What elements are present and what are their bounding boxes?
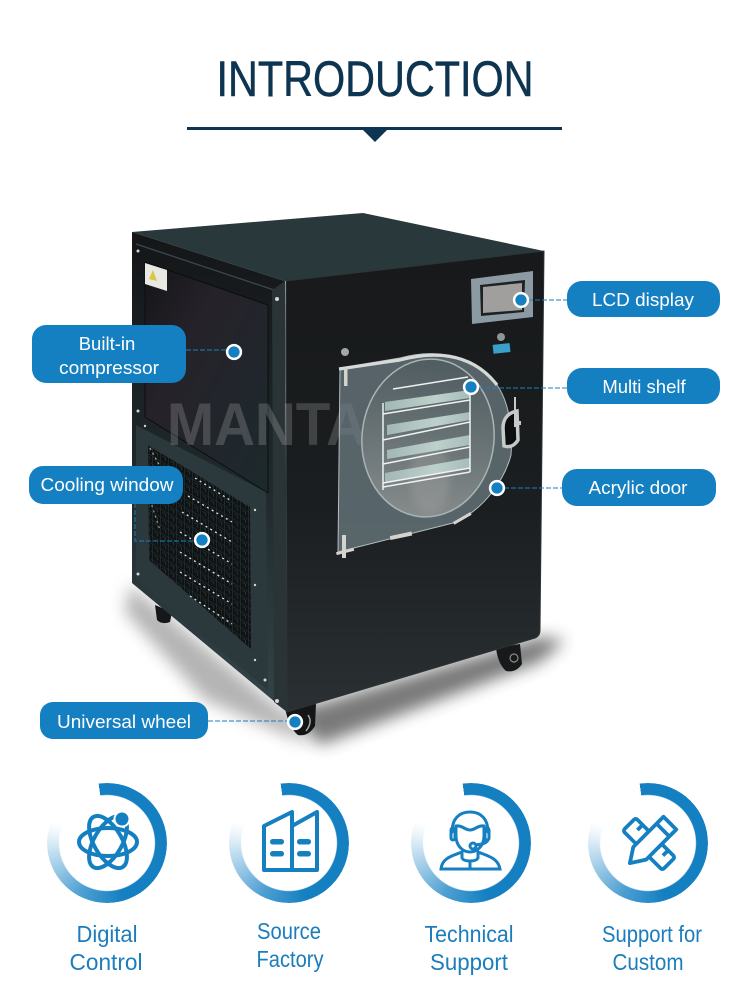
- label: LCD display: LCD display: [592, 289, 695, 310]
- caption: digital control: [70, 921, 142, 975]
- watermark: MANTA: [167, 391, 367, 458]
- door latch bar top: [339, 355, 497, 385]
- top face: [132, 213, 544, 281]
- door handle: [503, 397, 521, 447]
- marker dots: [195, 293, 528, 729]
- label: universal wheel: Universal wheel: [57, 711, 191, 732]
- grille highlights: [150, 448, 232, 624]
- caption: support for custom: Support for: [602, 921, 702, 947]
- floor shadow front: [290, 637, 565, 745]
- ring: technical support: [411, 783, 531, 903]
- caption: support for custom: Custom: [612, 949, 684, 975]
- machine: freeze dryer: [125, 213, 565, 745]
- label: acrylic door: [562, 469, 716, 506]
- vacuum chamber: [354, 353, 502, 523]
- label: built-in compressor: [32, 325, 186, 383]
- back wheel: [155, 605, 172, 623]
- caption: source factory: [256, 918, 324, 972]
- lower side panel: [136, 425, 268, 690]
- ring: source factory: [229, 783, 349, 903]
- caption: technical support: Technical: [424, 921, 514, 947]
- label: built-in compressor: compressor: [59, 357, 159, 378]
- left face: [132, 232, 287, 712]
- caption: support for custom: [602, 921, 702, 975]
- title underline with pointer: [187, 127, 562, 142]
- label: multi shelf: [567, 368, 720, 404]
- icon: support headset: [441, 812, 500, 869]
- corner post: [272, 281, 287, 712]
- label: built-in compressor: Built-in: [79, 333, 135, 354]
- floor shadow left: [125, 585, 310, 745]
- acrylic door panel: [338, 354, 511, 552]
- label: universal wheel: [40, 702, 208, 739]
- caption: digital control: Digital: [76, 921, 138, 947]
- leader lines: [135, 300, 567, 721]
- icon: pencil and ruler: [623, 817, 676, 870]
- label: multi shelf: Multi shelf: [602, 376, 686, 397]
- upper side panel: [145, 262, 268, 493]
- title: INTRODUCTION: [216, 51, 534, 107]
- indicator button and label: [493, 333, 510, 354]
- caption: technical support: Support: [430, 949, 509, 975]
- front wheel: [285, 704, 316, 735]
- icon: atom: [79, 810, 137, 874]
- ring: support for custom: [588, 783, 708, 903]
- label: cooling window: [29, 466, 183, 504]
- icon: factory building: [264, 812, 317, 870]
- chamber reflection: [410, 442, 450, 514]
- screws: [136, 250, 279, 703]
- right wheel: [496, 644, 522, 671]
- ring: digital control: [47, 783, 167, 903]
- front face: [286, 251, 544, 712]
- door clamps: [336, 348, 472, 558]
- warning sticker: [145, 263, 167, 291]
- label: acrylic door: Acrylic door: [588, 477, 688, 498]
- caption: digital control: Control: [70, 949, 142, 975]
- LCD screen: [471, 271, 533, 324]
- ventilation grille: [148, 445, 251, 649]
- caption: source factory: Source: [257, 918, 321, 944]
- label: cooling window: Cooling window: [40, 474, 174, 495]
- caption: source factory: Factory: [256, 946, 324, 972]
- shelves: [383, 377, 470, 490]
- panel frame line: [136, 244, 282, 700]
- caption: technical support: [424, 921, 514, 975]
- label: LCD display: [567, 281, 720, 317]
